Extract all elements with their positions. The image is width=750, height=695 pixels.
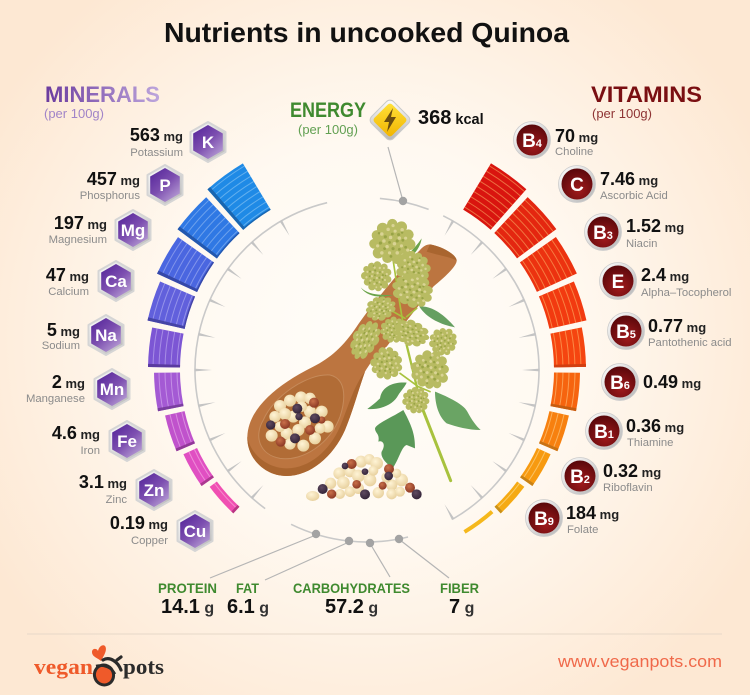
copper: Copper <box>131 535 168 547</box>
manganese: 2 mg <box>52 372 85 392</box>
potassium: K <box>202 133 215 152</box>
niacin: 1.52 mg <box>626 216 684 236</box>
alpha-tocopherol: E <box>612 272 624 293</box>
bar: manganese <box>123 126 611 614</box>
fat <box>227 580 269 618</box>
riboflavin: B2 <box>570 467 590 488</box>
bar: pyridoxine <box>133 136 601 604</box>
pantothenic acid: Pantothenic acid <box>648 337 732 349</box>
iron: Iron <box>81 445 100 457</box>
plant stem <box>393 262 451 481</box>
bar: riboflavin <box>70 73 664 667</box>
logo: pots <box>123 654 164 679</box>
bar: final short segment <box>100 103 634 637</box>
manganese <box>26 369 130 409</box>
magnesium: Mg <box>121 221 145 240</box>
folate: 184 mg <box>566 503 619 523</box>
magnesium <box>49 210 150 250</box>
pyridoxine <box>602 364 701 400</box>
protein <box>158 580 217 618</box>
heading: minerals: (per 100g) <box>44 106 104 121</box>
heading: vitamins: VITAMINS <box>591 82 702 107</box>
potassium: Potassium <box>130 147 183 159</box>
ascorbic acid <box>558 166 668 202</box>
copper: Cu <box>184 522 206 541</box>
vitamins list <box>514 122 732 536</box>
manganese: Manganese <box>26 393 85 405</box>
zinc: Zn <box>144 481 164 500</box>
iron: 4.6 mg <box>52 423 100 443</box>
sodium: 5 mg <box>47 320 80 340</box>
pyridoxine: 0.49 mg <box>643 372 701 392</box>
copper <box>110 511 212 551</box>
folate <box>526 500 619 536</box>
bar: niacin <box>52 55 682 685</box>
bar: zinc <box>94 97 640 643</box>
alpha-tocopherol: 2.4 mg <box>641 265 689 285</box>
logo: vegan <box>34 654 93 679</box>
niacin: B3 <box>593 223 613 244</box>
ascorbic acid: C <box>570 175 584 196</box>
alpha-tocopherol: Alpha–Tocopherol <box>641 287 731 299</box>
calcium: Calcium <box>48 286 89 298</box>
bar: thiamine <box>96 99 638 641</box>
magnesium: 197 mg <box>54 213 107 233</box>
plant leaves <box>361 238 481 467</box>
heading: vitamins <box>591 82 702 121</box>
manganese: Mn <box>100 380 124 399</box>
thiamine: 0.36 mg <box>626 416 684 436</box>
title: Nutrients in uncooked Quinoa <box>164 17 569 48</box>
calcium: Ca <box>105 272 127 291</box>
pyridoxine: B6 <box>610 373 630 394</box>
choline: B4 <box>522 131 543 152</box>
riboflavin: 0.32 mg <box>603 461 661 481</box>
heading: minerals <box>44 82 160 121</box>
iron <box>52 421 144 461</box>
energy per 100g: (per 100g) <box>298 122 358 137</box>
energy block <box>290 98 484 142</box>
flower clusters <box>343 219 462 418</box>
phosphorus: P <box>159 176 171 195</box>
pantothenic acid <box>608 312 732 350</box>
choline <box>514 122 598 158</box>
bar: sodium <box>150 153 584 587</box>
riboflavin <box>562 458 661 494</box>
zinc <box>79 470 172 510</box>
alpha-tocopherol <box>600 262 731 300</box>
niacin <box>584 214 684 250</box>
protein: PROTEIN <box>158 580 217 596</box>
energy value: 368 kcal <box>418 107 484 129</box>
pantothenic acid: 0.77 mg <box>648 316 706 336</box>
energy connector <box>388 147 407 205</box>
thiamine <box>586 412 684 450</box>
calcium <box>46 261 134 301</box>
ascorbic acid: 7.46 mg <box>600 169 658 189</box>
carbohydrates: CARBOHYDRATES <box>293 580 410 596</box>
energy heading: ENERGY <box>290 99 366 122</box>
copper: 0.19 mg <box>110 513 168 533</box>
choline: Choline <box>555 146 593 158</box>
bar: pantothenic acid <box>92 95 642 645</box>
heading: vitamins: (per 100g) <box>592 106 652 121</box>
sodium: Sodium <box>42 340 80 352</box>
folate: Folate <box>567 524 598 536</box>
niacin: Niacin <box>626 238 657 250</box>
pantothenic acid: B5 <box>616 322 636 343</box>
minerals list <box>26 122 226 551</box>
fiber: 7 g <box>449 596 474 618</box>
icon: lightning diamond <box>368 98 412 142</box>
sodium <box>42 315 124 355</box>
thiamine: Thiamine <box>627 437 673 449</box>
fat: FAT <box>236 580 259 596</box>
website: www.veganpots.com <box>557 652 722 671</box>
bar: alpha-tocopherol <box>78 81 656 659</box>
zinc: Zinc <box>106 494 127 506</box>
logo <box>34 645 164 688</box>
riboflavin: Riboflavin <box>603 482 653 494</box>
zinc: 3.1 mg <box>79 472 127 492</box>
macro connectors <box>210 530 449 580</box>
thiamine: B1 <box>594 422 614 443</box>
fiber: FIBER <box>440 580 479 596</box>
protein: 14.1 g <box>161 596 214 618</box>
bar: calcium <box>104 107 630 633</box>
phosphorus: Phosphorus <box>80 190 140 202</box>
bar: folate <box>58 61 676 679</box>
carbohydrates: 57.2 g <box>325 596 378 618</box>
illustration: spoon and quinoa plant <box>247 219 481 501</box>
phosphorus: 457 mg <box>87 169 140 189</box>
magnesium: Magnesium <box>49 234 107 246</box>
fat: 6.1 g <box>227 596 269 618</box>
heading: minerals: MINERALS <box>45 82 160 107</box>
gauge ring and ticks <box>127 130 607 610</box>
folate: B9 <box>534 509 554 530</box>
icon: pot with steam <box>92 645 121 688</box>
choline: 70 mg <box>555 126 598 146</box>
iron: Fe <box>117 432 137 451</box>
potassium <box>130 122 226 162</box>
fiber <box>440 580 479 618</box>
ascorbic acid: Ascorbic Acid <box>600 190 668 202</box>
bar: magnesium <box>67 70 667 670</box>
spoon <box>247 244 457 476</box>
calcium: 47 mg <box>46 265 89 285</box>
potassium: 563 mg <box>130 125 183 145</box>
carbohydrates <box>293 580 410 618</box>
phosphorus <box>80 165 182 205</box>
seeds in spoon <box>266 391 334 452</box>
sodium: Na <box>95 326 117 345</box>
seed pile <box>306 454 422 501</box>
bar: iron <box>102 105 632 635</box>
macronutrients <box>158 580 479 618</box>
bar: copper <box>96 99 638 641</box>
